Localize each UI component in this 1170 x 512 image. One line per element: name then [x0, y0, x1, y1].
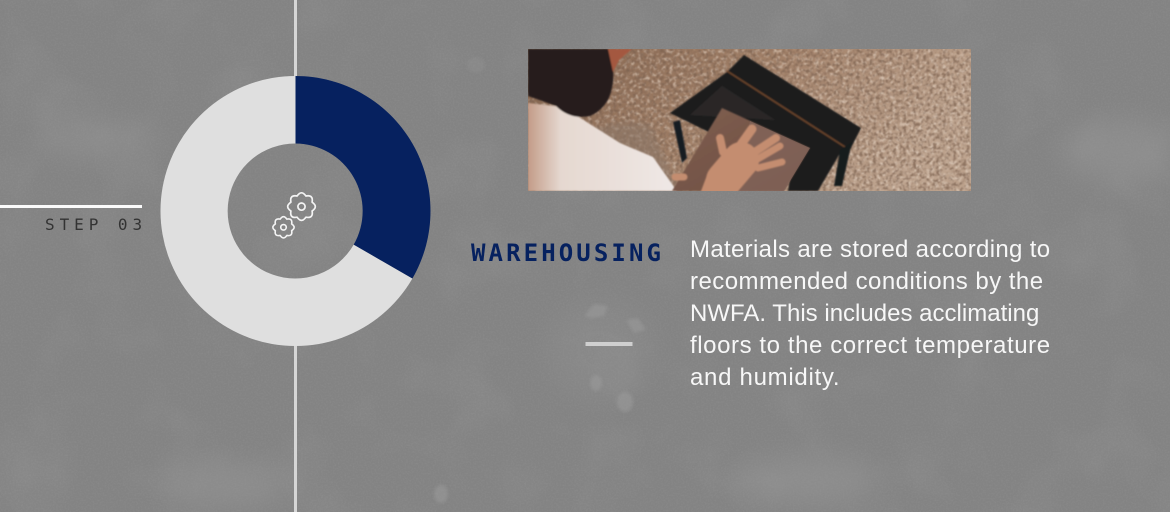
hand [675, 129, 782, 196]
body text [690, 236, 1051, 391]
icon: gears [273, 193, 315, 238]
step label: STEP 03 [45, 215, 147, 234]
hair [528, 49, 613, 117]
body text: and humidity. [690, 364, 840, 391]
vertical axis line, top [294, 0, 297, 77]
heading: warehousing: WAREHOUSING [471, 239, 664, 267]
shirt and figure [528, 49, 677, 191]
donut remainder segment [160, 76, 412, 346]
wooden plank [672, 108, 810, 191]
body text: floors to the correct temperature [690, 332, 1051, 359]
large gear [288, 193, 315, 220]
donut chart [160, 76, 430, 346]
photo: woodworker with plank at saw table [528, 49, 971, 196]
body text: Materials are stored according to [690, 236, 1050, 263]
step rule [0, 205, 142, 208]
sawdust floor [528, 49, 971, 191]
small gear [273, 217, 294, 238]
short divider [586, 342, 632, 346]
body text: recommended conditions by the [690, 268, 1044, 295]
vertical axis line, bottom [294, 345, 297, 512]
donut highlighted segment [296, 76, 430, 278]
body text: NWFA. This includes acclimating [690, 300, 1039, 327]
saw table [670, 55, 861, 191]
